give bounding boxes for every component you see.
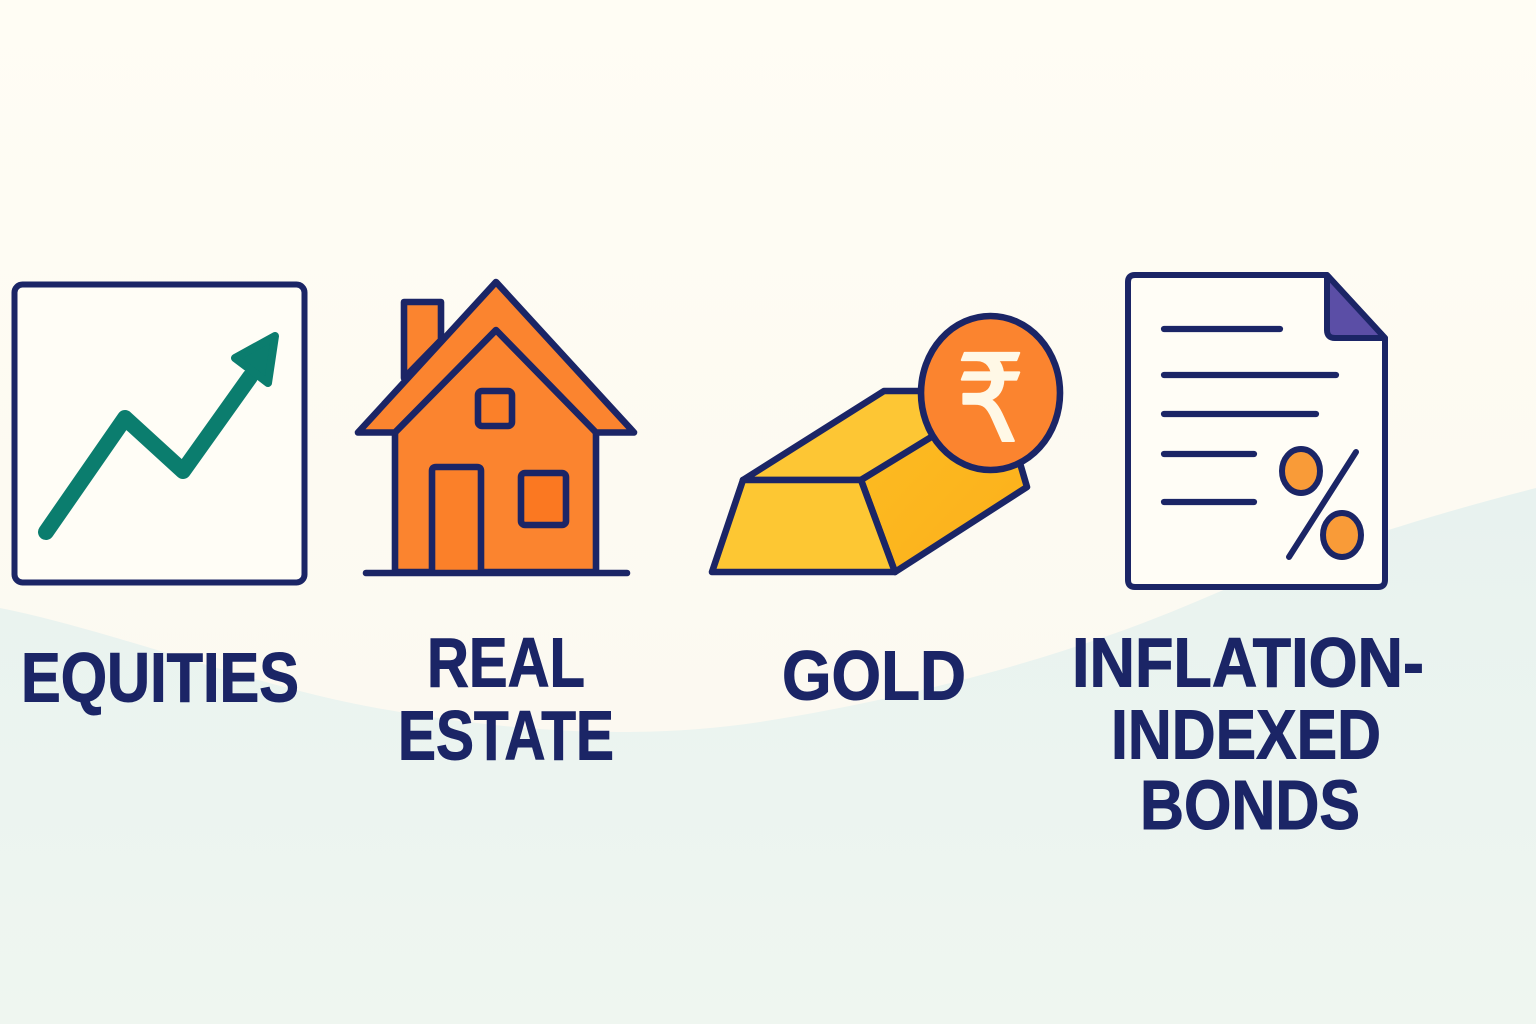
icon: gold bar with rupee coin — [712, 316, 1060, 572]
label: equities: EQUITIES — [21, 638, 299, 716]
label: inflation-indexed bonds: BONDS — [1140, 766, 1360, 844]
label: inflation-indexed bonds: INFLATION- — [1072, 624, 1424, 702]
label: gold: GOLD — [782, 636, 966, 714]
icon: bond document — [1128, 275, 1385, 587]
label: inflation-indexed bonds: INDEXED — [1111, 696, 1381, 774]
icon: house — [358, 282, 634, 573]
label: real estate: REAL — [427, 624, 585, 702]
label: real estate — [398, 624, 614, 774]
icon: equities chart — [14, 284, 304, 582]
label: inflation-indexed bonds — [1072, 624, 1424, 844]
label: real estate: ESTATE — [398, 696, 614, 774]
icon: gold bar with rupee coin: ₹ — [956, 330, 1025, 471]
